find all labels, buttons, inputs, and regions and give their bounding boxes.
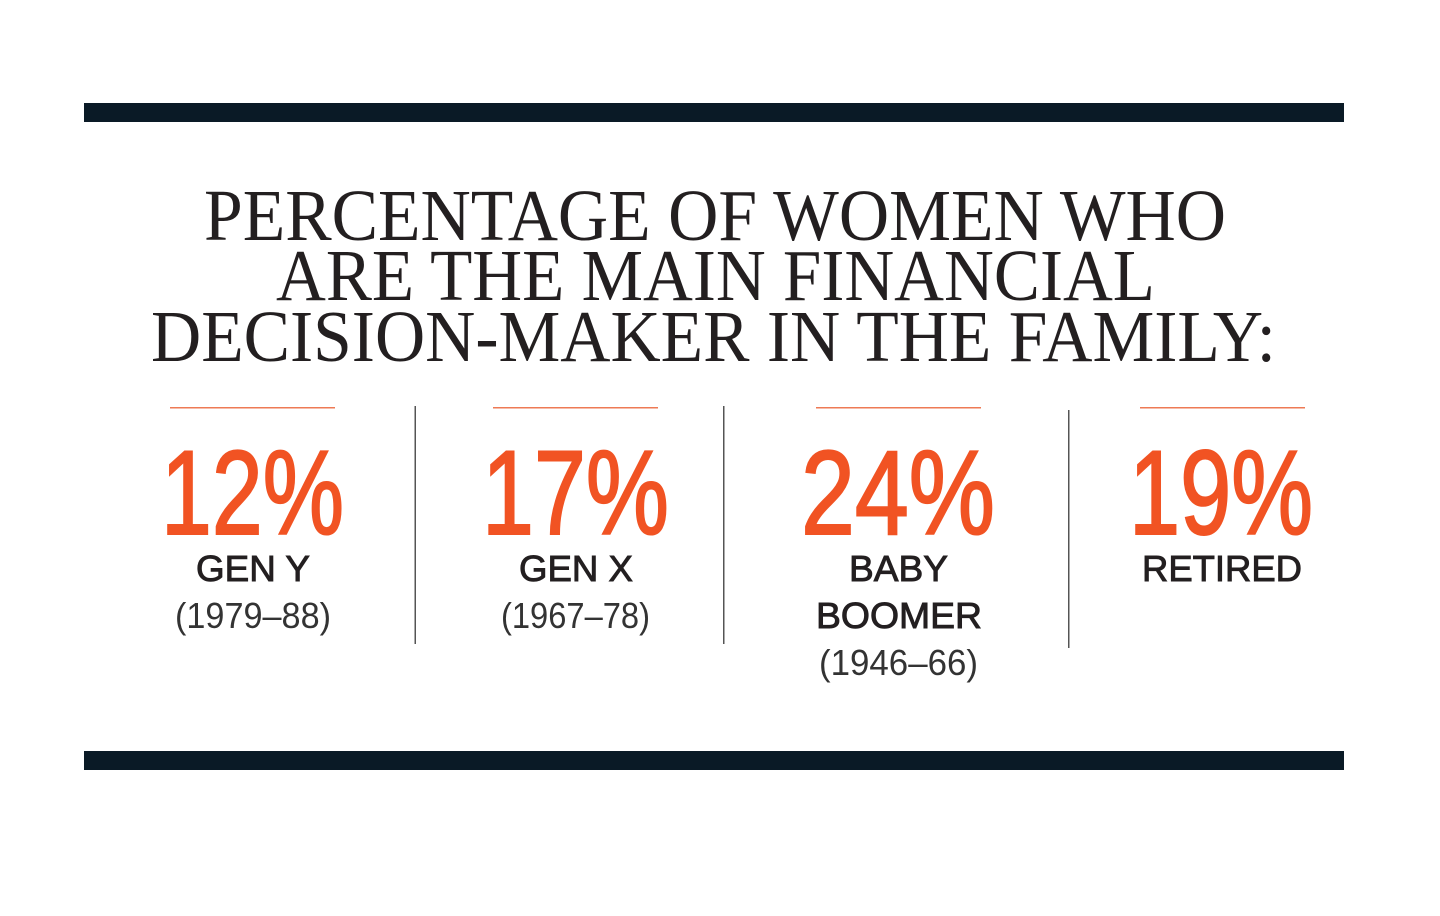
panel: Gen X xyxy=(482,407,669,636)
panel: Retired: RETIRED xyxy=(1142,548,1302,589)
divider xyxy=(1068,410,1070,648)
panel: Gen Y: (1979–88) xyxy=(175,595,331,636)
panel: Retired: 19% xyxy=(1129,426,1313,560)
panel: Baby Boomer: BABY xyxy=(849,548,948,589)
title xyxy=(151,175,1276,377)
divider xyxy=(414,406,416,644)
panel: Retired xyxy=(1129,407,1313,589)
panel: Baby Boomer xyxy=(801,407,995,683)
title: ARE THE MAIN FINANCIAL xyxy=(276,235,1155,316)
title: DECISION-MAKER IN THE FAMILY: xyxy=(151,296,1276,377)
divider xyxy=(723,406,724,644)
panel: Gen X: GEN X xyxy=(519,548,633,589)
panel: Baby Boomer: 24% xyxy=(801,426,995,560)
panel: Gen X: (1967–78) xyxy=(501,595,650,636)
panel: Gen Y xyxy=(161,407,344,636)
panel: Baby Boomer: (1946–66) xyxy=(819,642,978,683)
panel: Baby Boomer: BOOMER xyxy=(816,595,982,636)
top bar xyxy=(84,103,1344,122)
panel: Gen Y: GEN Y xyxy=(196,548,310,589)
panel: Gen X: 17% xyxy=(482,426,669,560)
bottom bar xyxy=(84,751,1344,770)
title: PERCENTAGE OF WOMEN WHO xyxy=(204,175,1226,256)
panel: Gen Y: 12% xyxy=(161,426,344,560)
